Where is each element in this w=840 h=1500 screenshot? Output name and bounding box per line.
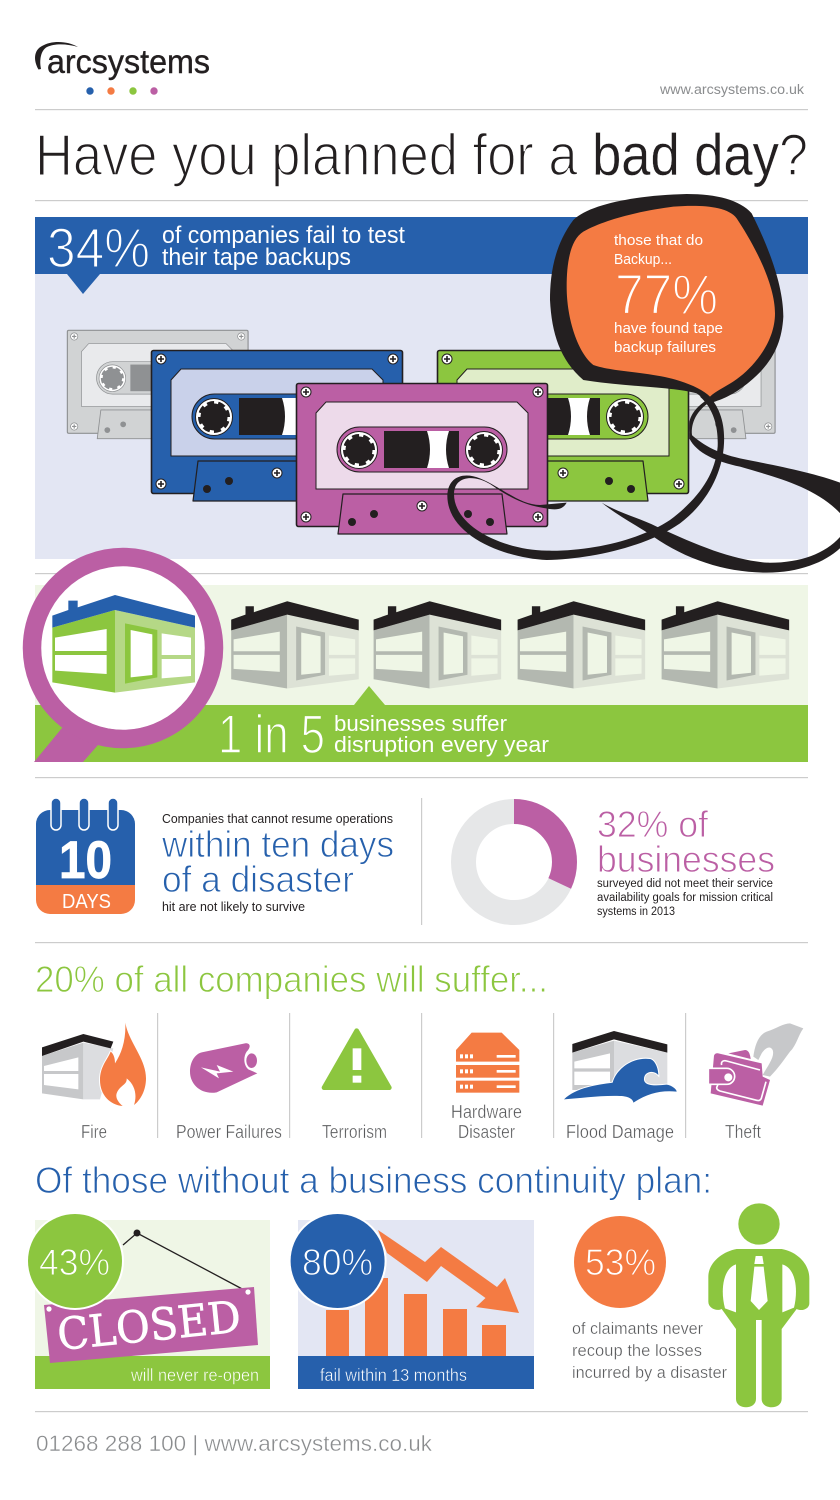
icon: flood	[564, 1031, 677, 1103]
label: flood damage: Flood Damage	[566, 1122, 674, 1142]
label: fire: Fire	[81, 1122, 107, 1142]
header logo: arcsystems	[47, 43, 210, 80]
text: within ten days	[161, 812, 394, 914]
panel: 43% closed	[28, 1214, 270, 1389]
arrow: falling trend	[378, 1230, 519, 1313]
blue banner: of companies fail to test	[162, 222, 405, 249]
callout ring	[550, 194, 783, 403]
icon: power failure battery	[190, 1043, 257, 1093]
panel: 43% closed: 43%	[39, 1242, 110, 1283]
text: 32% of businesses: availability goals for mission critical	[597, 892, 773, 904]
blue banner: their tape backups	[162, 244, 351, 271]
cassette: green	[438, 350, 688, 501]
panel: 80% fail: fail within 13 months	[320, 1365, 467, 1385]
text: 32% of businesses	[597, 804, 775, 918]
cassette: pink	[296, 384, 548, 534]
label: hardware disaster: Hardware	[451, 1102, 522, 1122]
blue banner: 34%	[47, 216, 150, 279]
heading: 20% of all companies: 20% of all companies will suffer...	[35, 959, 548, 1000]
panel: 1 in 5 businesses: businesses suffer	[334, 711, 507, 736]
website url: www.arcsystems.co.uk	[659, 82, 804, 97]
callout: 77% tape failures: backup failures	[614, 340, 716, 356]
text: 32% of businesses: businesses	[597, 839, 775, 880]
unspooled tape	[447, 393, 840, 573]
text: within ten days: of a disaster	[162, 859, 354, 900]
text: 32% of businesses: surveyed did not meet their service	[597, 878, 773, 890]
buildings: grey row	[231, 601, 789, 689]
icon: 10 days calendar	[36, 798, 135, 914]
panel: 53% claimants: 53%	[585, 1242, 656, 1283]
text: within ten days: within ten days	[161, 824, 394, 865]
callout: 77% tape failures: have found tape	[614, 321, 723, 337]
magnifier	[32, 557, 214, 762]
label: hardware disaster	[451, 1102, 522, 1142]
closed sign: CLOSED	[55, 1292, 243, 1361]
label: theft: Theft	[725, 1122, 761, 1142]
panel: 1 in 5 businesses: 1 in 5	[218, 703, 325, 765]
icon: 10 days calendar: 10	[59, 831, 112, 890]
title: Have you planned for a bad day?	[35, 123, 808, 188]
header logo	[35, 42, 210, 95]
label: power failures: Power Failures	[176, 1122, 282, 1142]
icon: theft wallet and hand	[708, 1023, 803, 1106]
panel: 53% claimants	[572, 1203, 809, 1407]
text: within ten days: hit are not likely to survive	[162, 900, 305, 914]
callout: 77% tape failures: Backup...	[614, 252, 672, 268]
panel: 53% claimants: recoup the losses	[572, 1342, 702, 1360]
panel: 53% claimants: incurred by a disaster	[572, 1364, 727, 1382]
text: within ten days: Companies that cannot resume operations	[162, 812, 393, 826]
icon: terrorism warning triangle	[324, 1031, 389, 1088]
panel: 53% claimants: of claimants never	[572, 1320, 703, 1338]
text: 32% of businesses: systems in 2013	[597, 906, 675, 918]
cassette: grey left	[67, 330, 248, 439]
label: terrorism: Terrorism	[322, 1122, 387, 1142]
footer contact: 01268 288 100 | www.arcsystems.co.uk	[36, 1431, 433, 1456]
panel: tape backups	[35, 216, 808, 559]
icon: fire	[42, 1023, 146, 1106]
panel: 1 in 5 businesses: disruption every year	[334, 732, 549, 757]
donut chart: 32%	[464, 812, 564, 912]
text: 32% of businesses: 32% of	[597, 804, 709, 845]
icon: man with empty pockets	[708, 1203, 809, 1407]
label: hardware disaster: Disaster	[458, 1122, 515, 1142]
bar chart	[326, 1278, 506, 1356]
callout: 77% tape failures: 77%	[615, 263, 718, 327]
callout: 77% tape failures	[550, 194, 783, 403]
panel: 80% fail	[291, 1214, 534, 1389]
heading: without a plan: Of those without a business continuity plan:	[35, 1160, 712, 1201]
icon: 10 days calendar: DAYS	[62, 891, 111, 913]
blue banner	[35, 216, 808, 294]
cassette: blue	[152, 350, 402, 501]
panel: 80% fail: 80%	[302, 1242, 373, 1283]
panel: 43% closed: will never re-open	[130, 1365, 259, 1385]
cassette: grey right	[594, 330, 775, 439]
panel: 1 in 5 businesses	[32, 557, 808, 765]
icon: hardware server	[456, 1033, 519, 1093]
callout: 77% tape failures: those that do	[614, 233, 703, 249]
